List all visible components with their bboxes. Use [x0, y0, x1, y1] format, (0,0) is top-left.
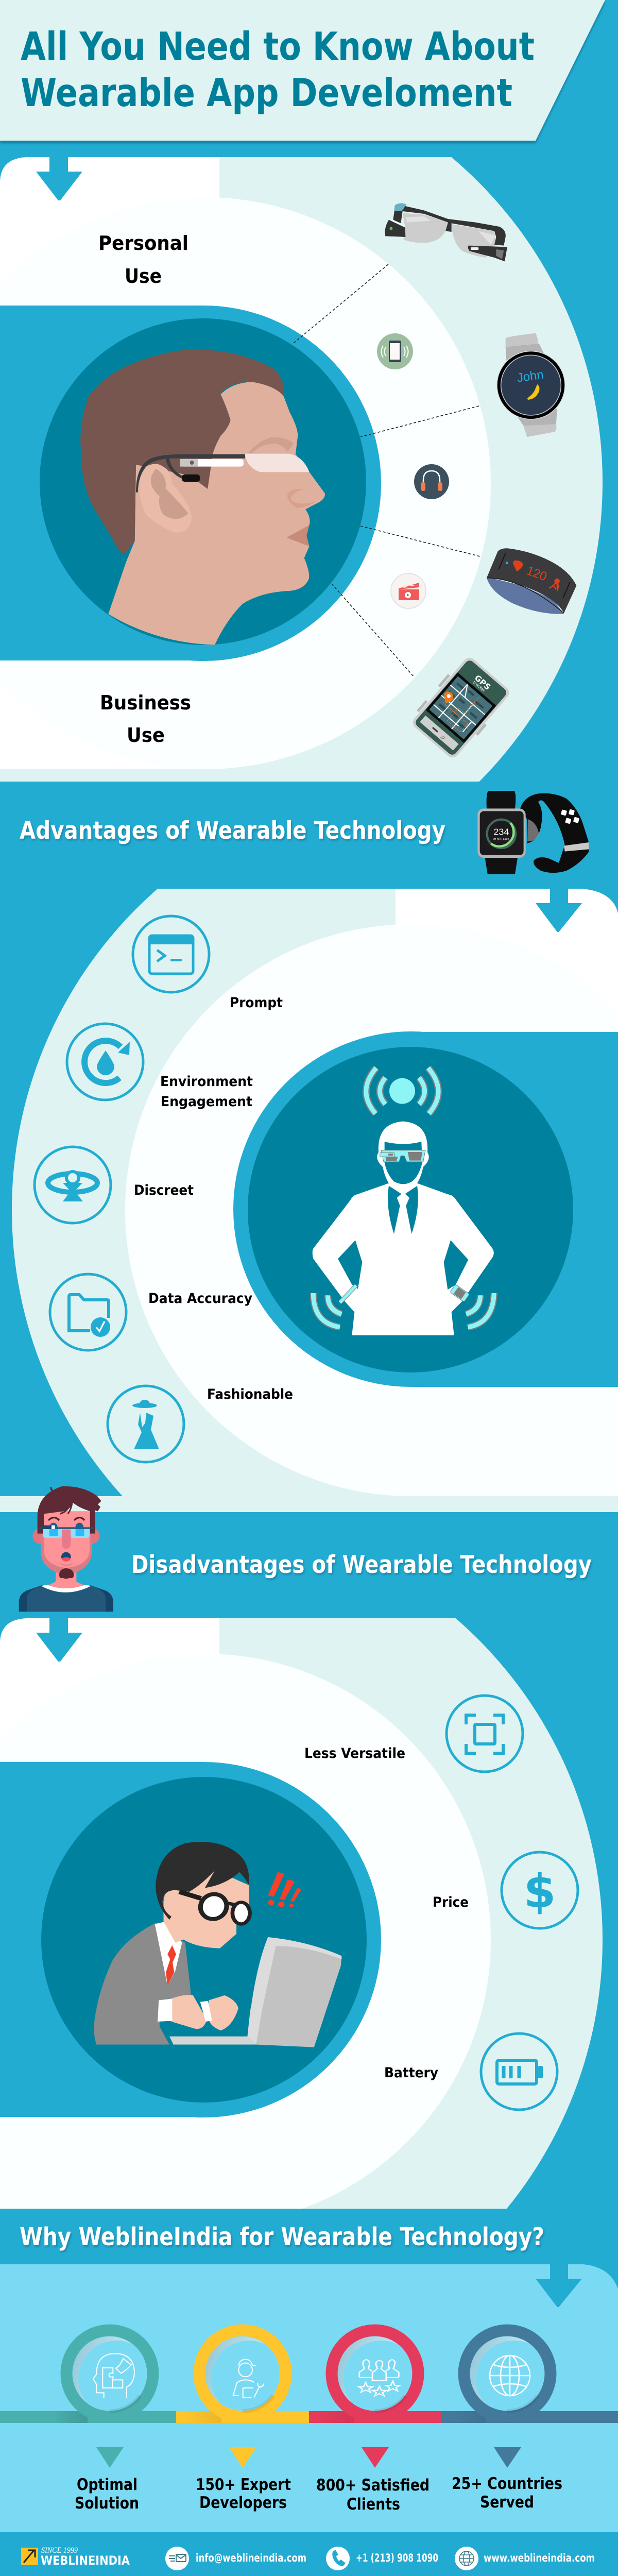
icon: dollar price — [502, 1852, 578, 1928]
panel: why weblineindia — [0, 2264, 618, 2532]
logo: weblineindia: SINCE 1999 — [41, 2546, 78, 2555]
logo: weblineindia: WEBLINEINDIA — [41, 2553, 130, 2568]
ribbon: satisfied clients — [309, 2330, 441, 2423]
icon: battery — [481, 2033, 557, 2110]
icon: dollar price: $ — [524, 1865, 556, 1919]
icon: environment engagement — [67, 1024, 143, 1100]
device: fitness band 120: 120 — [525, 564, 548, 584]
label: personal use: Personal — [98, 232, 188, 255]
label: less versatile: Less Versatile — [304, 1745, 405, 1761]
label: personal use: Use — [125, 265, 162, 287]
signal waves above head — [366, 1068, 438, 1114]
label: environment engagement — [160, 1074, 253, 1110]
label: countries served: 25+ Countries — [452, 2475, 562, 2493]
panel: disadvantages — [0, 1618, 603, 2209]
device: apple watch and black bracelet: of 600 Cals — [493, 838, 509, 841]
device: apple watch and black bracelet: 234 — [493, 827, 509, 837]
label: optimal solution — [75, 2476, 139, 2513]
label: data accuracy: Data Accuracy — [148, 1291, 252, 1307]
device: round smart watch — [496, 333, 565, 437]
label: optimal solution: Solution — [75, 2494, 139, 2513]
illustration: man wearing smart glasses — [80, 349, 325, 645]
device: GPS tracker: GPS — [473, 673, 492, 692]
label: battery: Battery — [384, 2065, 438, 2081]
label: discreet: Discreet — [134, 1182, 194, 1198]
title banner: All You Need to Know About — [21, 24, 535, 69]
device: fitness band 120 — [487, 548, 576, 614]
label: business use — [101, 694, 191, 742]
label: fashionable: Fashionable — [207, 1386, 293, 1402]
label: satisfied clients: 800+ Satisfied — [316, 2476, 430, 2495]
label: business use: Use — [127, 724, 165, 747]
device: round smart watch: John — [516, 368, 544, 385]
icon: clients with stars — [358, 2360, 400, 2396]
footer bar — [0, 2532, 618, 2576]
label: environment engagement: Engagement — [161, 1094, 252, 1110]
title banner: Wearable App Develoment — [21, 70, 512, 115]
label: environment engagement: Environment — [160, 1074, 253, 1090]
contact: website — [455, 2547, 595, 2570]
device: GPS tracker — [413, 657, 509, 757]
arrow: personal use — [36, 157, 82, 200]
illustration: surprised man with glasses — [19, 1486, 113, 1612]
signal waves at wrists — [313, 1293, 494, 1327]
label: prompt: Prompt — [230, 995, 283, 1011]
ribbon: optimal solution — [0, 2330, 176, 2423]
label: business use: Business — [100, 691, 191, 714]
illustration: businessman with wearables — [313, 1068, 494, 1335]
logo: weblineindia — [21, 2546, 130, 2568]
icon: vibrating phone — [377, 333, 413, 369]
illustration: worried man at laptop — [94, 1842, 341, 2047]
heading: advantages: Advantages of Wearable Technology — [20, 817, 445, 845]
label: price: Price — [433, 1894, 469, 1910]
label: satisfied clients — [316, 2476, 430, 2514]
icon: globe — [490, 2355, 530, 2396]
icon: data accuracy folder — [50, 1274, 126, 1350]
contact: phone: +1 (213) 908 1090 — [356, 2552, 438, 2564]
arrow: why weblineindia — [536, 2264, 582, 2307]
icon: developer with wrench — [233, 2359, 264, 2397]
label: optimal solution: Optimal — [77, 2476, 138, 2494]
label: expert developers — [196, 2476, 291, 2512]
device: smart glasses — [385, 204, 507, 261]
icon: fashionable — [108, 1386, 184, 1462]
contact: email: info@weblineindia.com — [196, 2552, 306, 2564]
dotted connector lines — [294, 264, 480, 676]
device: GPS tracker: tracker — [472, 680, 486, 693]
label: countries served — [452, 2475, 562, 2512]
icon: video clapper — [391, 573, 426, 608]
contact: email — [165, 2547, 306, 2570]
icon: terminal prompt — [133, 916, 209, 992]
smart glasses — [380, 1150, 425, 1162]
icon: discreet — [35, 1147, 111, 1223]
icon: less versatile frame — [447, 1696, 523, 1772]
label: expert developers: Developers — [199, 2494, 287, 2512]
device: apple watch and black bracelet — [477, 791, 589, 874]
icon: headphones — [414, 464, 449, 499]
label: countries served: Served — [480, 2493, 534, 2512]
label: satisfied clients: Clients — [347, 2495, 400, 2514]
title banner — [0, 0, 605, 141]
panel: advantages — [0, 889, 618, 1512]
arrow: advantages — [536, 889, 582, 932]
label: personal use — [100, 235, 187, 283]
ribbon: countries served — [441, 2330, 618, 2423]
icon: head with puzzle — [93, 2353, 134, 2398]
arrow: disadvantages — [36, 1618, 82, 1662]
pointer triangles — [96, 2447, 521, 2468]
contact: phone — [326, 2547, 438, 2570]
label: expert developers: 150+ Expert — [196, 2476, 291, 2494]
ribbon: expert developers — [176, 2330, 309, 2423]
panel: personal and business use — [0, 157, 603, 782]
